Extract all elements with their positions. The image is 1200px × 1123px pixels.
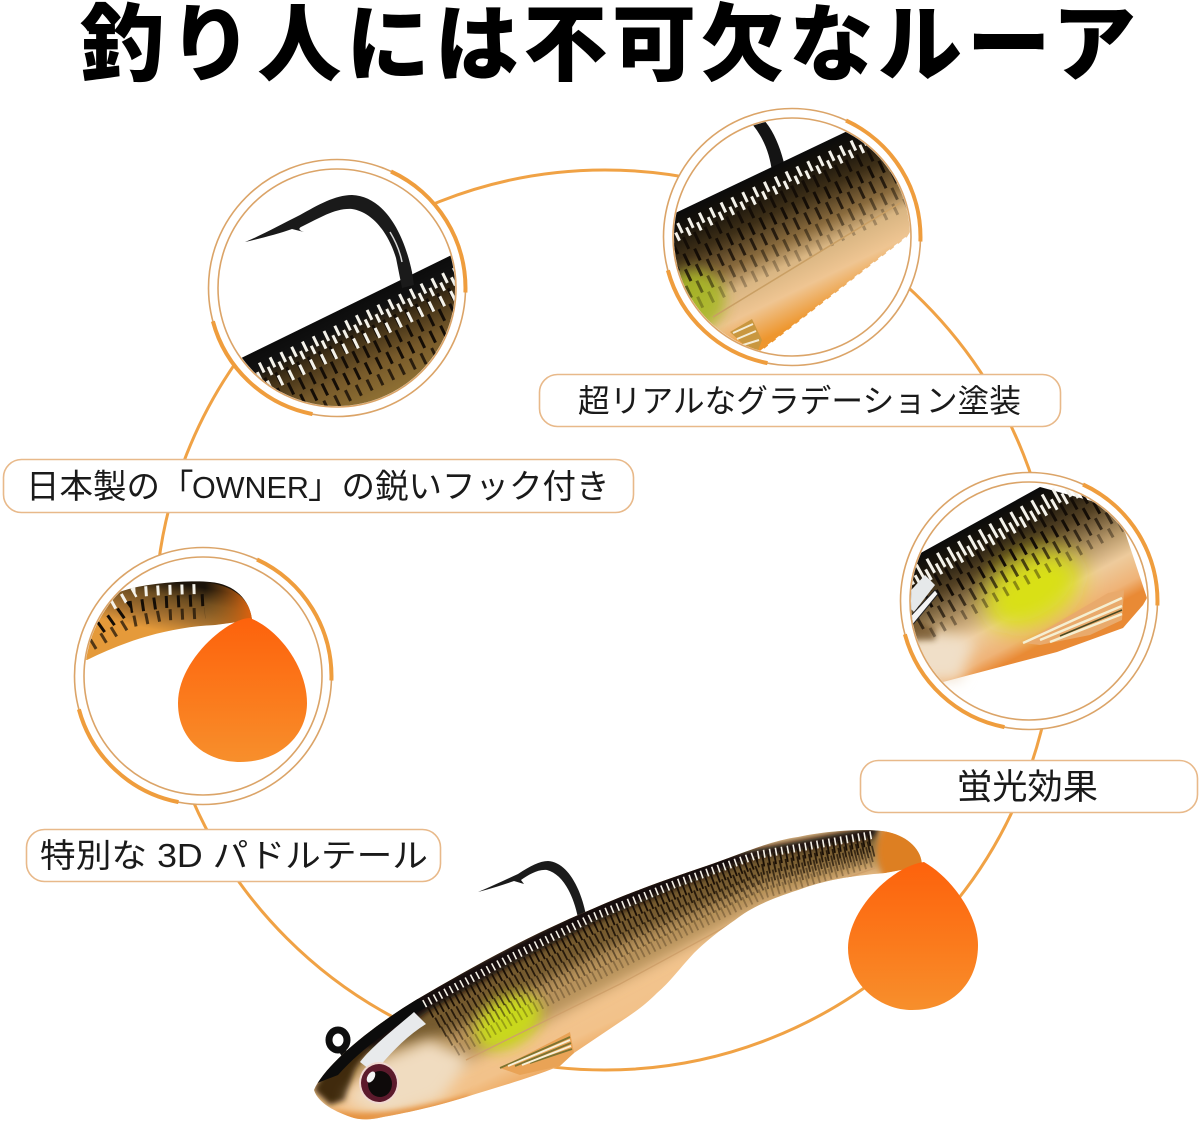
lure body: [300, 820, 940, 1123]
pectoral fin: [500, 1032, 574, 1075]
label: Owner hook: 日本製の「: [26, 469, 194, 506]
label: Owner hook: OWNER: [192, 471, 309, 505]
label: Owner hook: 」の鋭いフック付き: [308, 469, 610, 506]
eye: [359, 1062, 399, 1104]
connecting circle line: [155, 170, 1055, 1070]
silver gill stripe: [360, 1012, 426, 1073]
arc accents: [668, 120, 920, 363]
photo: paddle tail: [86, 581, 307, 762]
arc accents: [905, 484, 1157, 727]
panel: hook close-up: [208, 158, 468, 418]
jig head ring: [329, 1030, 352, 1066]
label: gradient paint: 超リアルなグラデーション塗装: [578, 383, 1021, 419]
paddle tail: [848, 862, 978, 1010]
photo: yellow fluorescent patch: [911, 487, 1147, 687]
panel: fluorescent close-up: [900, 472, 1160, 730]
arc accents: [79, 560, 331, 802]
label: fluorescent effect: 蛍光効果: [957, 768, 1098, 807]
label: 3D paddle tail: 特別な 3D パドルテール: [40, 837, 428, 874]
photo: lure body gradient: [674, 122, 910, 352]
panel: 3D paddle tail close-up: [60, 548, 332, 804]
label: gradient paint: [540, 374, 1060, 426]
label: 3D paddle tail: [26, 830, 440, 882]
hook: [478, 861, 586, 918]
label: fluorescent effect: [860, 760, 1198, 812]
label: Owner hook: [4, 460, 634, 512]
full lure photo: [300, 820, 978, 1123]
photo: hook and lure back: [242, 195, 455, 406]
arc accents: [213, 172, 465, 414]
panel: gradient paint close-up: [662, 108, 922, 366]
title: 釣り人には不可欠なルーア: [80, 0, 1136, 92]
